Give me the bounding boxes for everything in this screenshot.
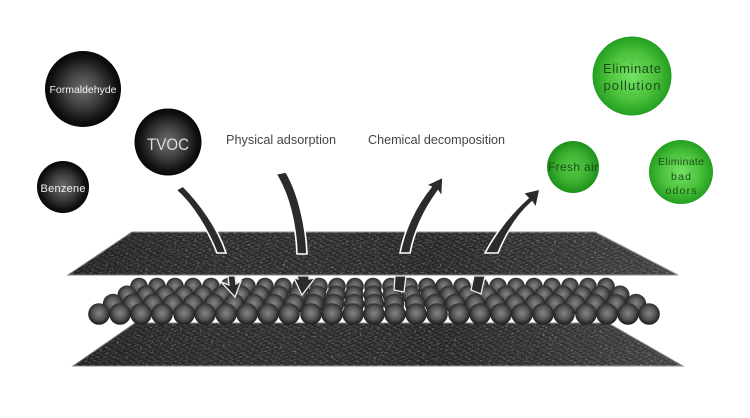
result: Eliminate pollution: pollution <box>604 78 660 93</box>
pollutant: Formaldehyde: Formaldehyde <box>50 84 117 96</box>
result: Eliminate bad odors: odors <box>666 185 696 197</box>
third sphere row <box>118 286 630 304</box>
result: Fresh air: Fresh air <box>548 160 598 174</box>
second sphere row <box>103 294 646 314</box>
pollutant: Formaldehyde <box>45 51 121 127</box>
result: Eliminate bad odors: Eliminate <box>658 156 704 168</box>
result: Eliminate bad odors <box>649 140 713 204</box>
pollutant: Benzene <box>37 161 89 213</box>
back sphere row <box>130 278 615 295</box>
label: Chemical decomposition: Chemical decomposition <box>368 132 505 147</box>
front sphere row <box>88 303 660 325</box>
pollutant: TVOC: TVOC <box>147 135 189 154</box>
result: Eliminate bad odors: bad <box>671 171 691 183</box>
bottom filter sheet <box>70 323 686 366</box>
label: Physical adsorption: Physical adsorption <box>226 132 336 147</box>
arrow: chemical decomposition up <box>400 177 443 253</box>
arrow: TVOC pulled into sheet <box>176 186 226 253</box>
top filter sheet <box>66 232 682 275</box>
arrow: fresh air up <box>485 189 540 253</box>
arrow: physical adsorption into sheet <box>276 172 307 254</box>
pollutant: TVOC <box>134 108 202 176</box>
lower arrow tips over spheres <box>221 276 485 297</box>
pollutant: Benzene: Benzene <box>40 183 86 195</box>
result: Eliminate pollution <box>592 36 672 116</box>
result: Fresh air <box>547 141 599 193</box>
result: Eliminate pollution: Eliminate <box>603 61 661 76</box>
activated carbon spheres layer <box>88 278 660 325</box>
